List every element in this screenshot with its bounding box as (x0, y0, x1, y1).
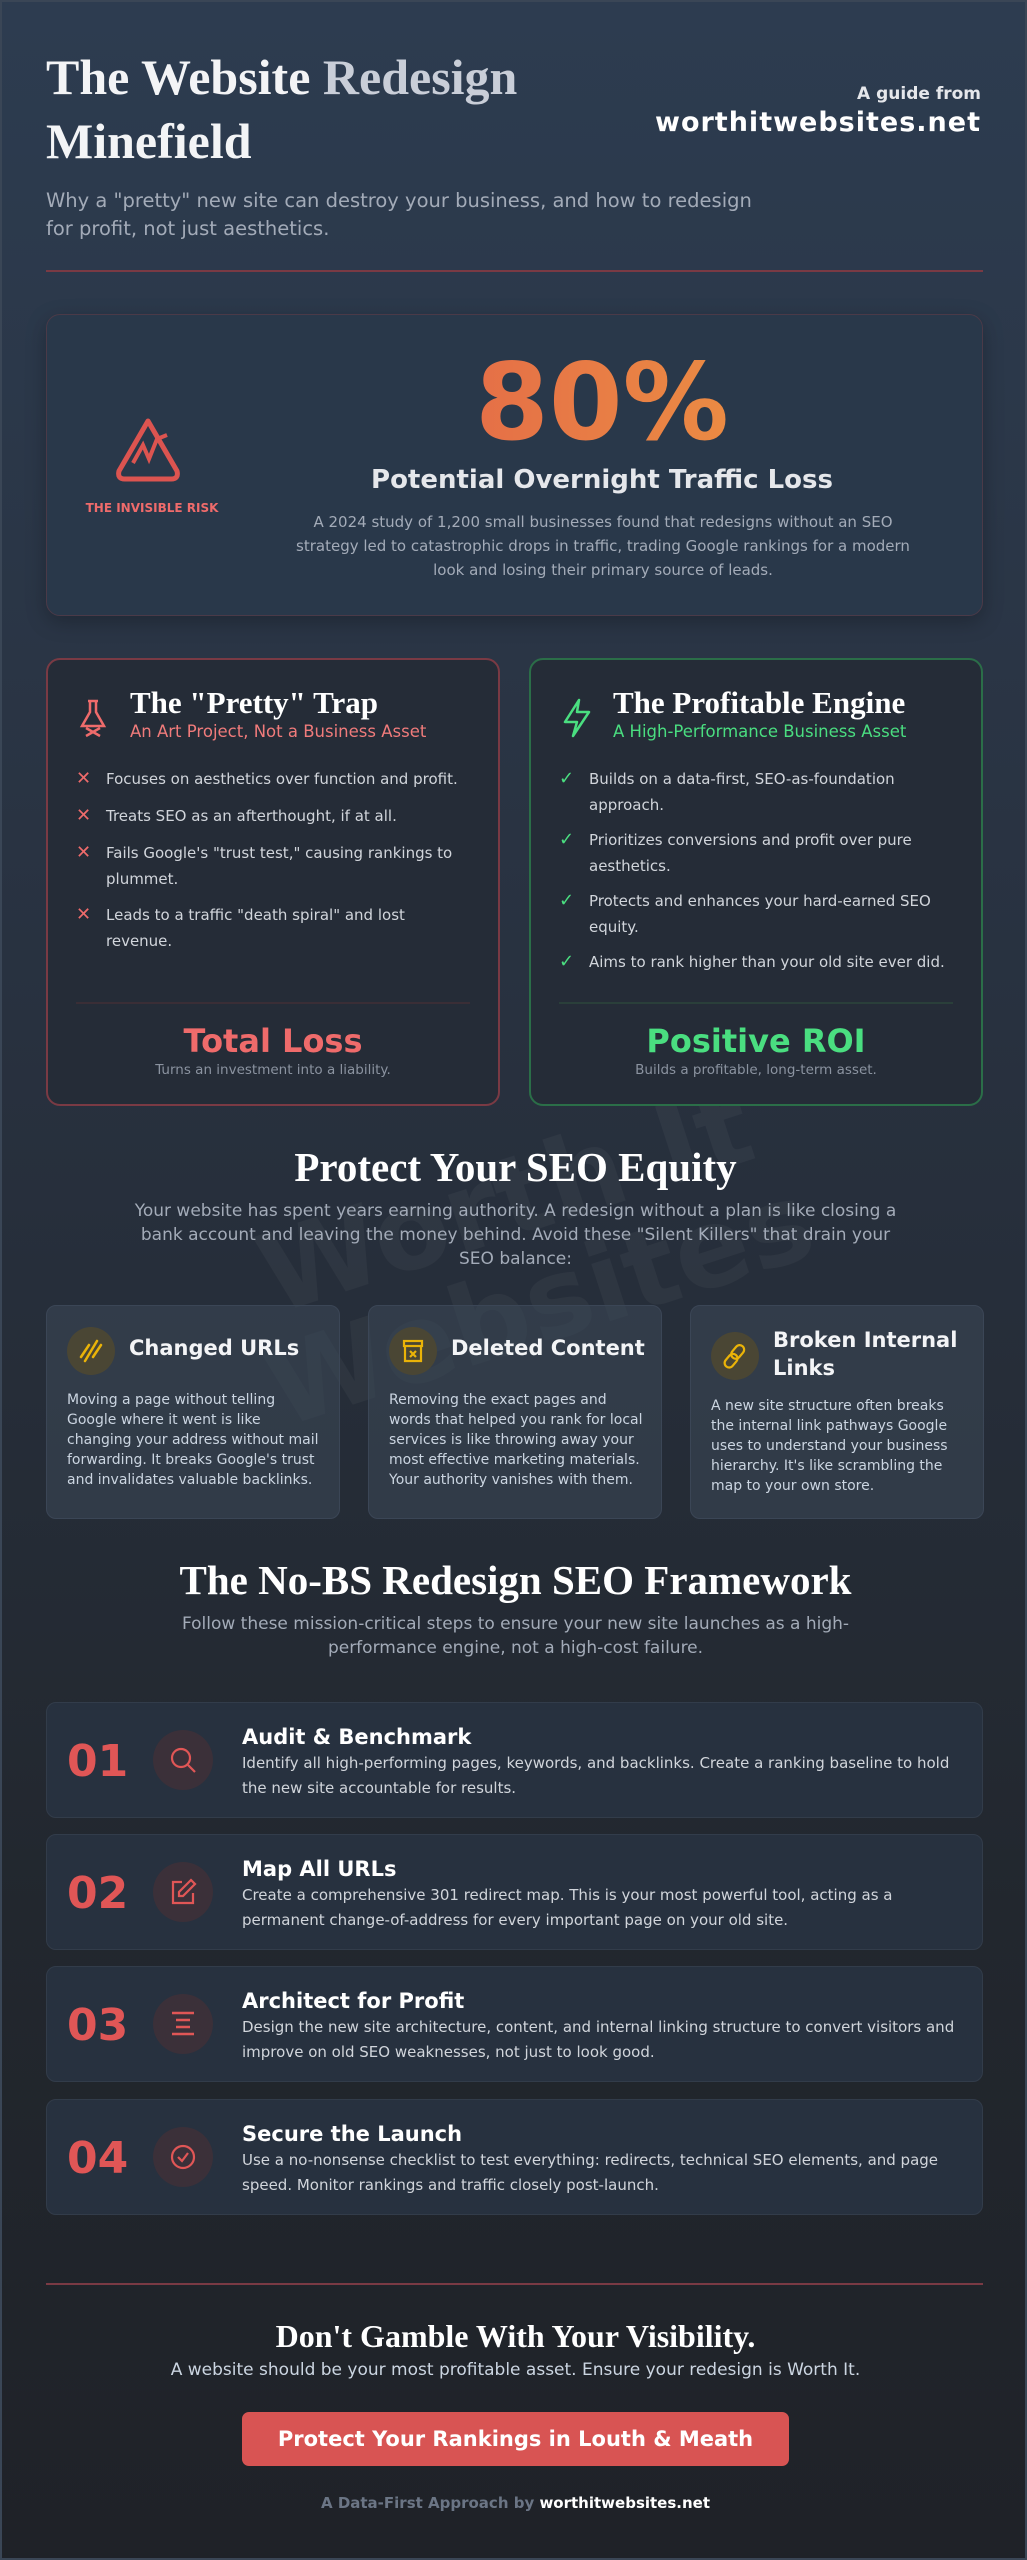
step 02: Map All URLs (242, 1857, 396, 1881)
panel: profitable engine: ✓ (559, 890, 574, 911)
heading: SEO equity: Protect Your SEO Equity (294, 1144, 737, 1190)
step 03 (46, 1966, 983, 2082)
list: Builds on a data-first, SEO-as-foundation approach. (589, 770, 895, 814)
step 04 (46, 2099, 983, 2215)
panel: profitable engine: Builds a profitable, long-term asset. (635, 1062, 877, 1078)
card: broken links: A new site structure often breaks the internal link pathways Google uses to understand your business hierarchy. It's like scrambling the map to your own store. (711, 1398, 948, 1494)
footer: A Data-First Approach by worthitwebsites.net (321, 2494, 710, 2512)
panel: profitable engine (529, 658, 983, 1106)
brand (655, 84, 981, 138)
heading: cta: Don't Gamble With Your Visibility. (276, 2318, 755, 2354)
panel: profitable engine: Prioritizes conversions and profit over pure aesthetics. (589, 831, 912, 875)
list: ✓ (559, 768, 574, 789)
card: deleted content: Removing the exact pages and words that helped you rank for local services is like throwing away your most effective marketing materials. Your authority vanishes with them. (389, 1392, 643, 1488)
step 01: Identify all high-performing pages, keywords, and backlinks. Create a ranking baseline to hold the new site accountable for results. (242, 1754, 949, 1797)
text: equity intro (134, 1201, 896, 1269)
stat label: Potential Overnight Traffic Loss (371, 465, 833, 495)
text: equity intro: SEO balance: (459, 1249, 572, 1269)
heading: The Profitable Engine (613, 685, 905, 720)
panel: pretty trap: Leads to a traffic "death spiral" and lost (106, 906, 405, 924)
icon: risk (116, 418, 180, 482)
icon: lines (153, 1994, 213, 2054)
step 01 (46, 1702, 983, 1818)
card: changed urls: Changed URLs (129, 1336, 299, 1360)
panel: stat (46, 314, 983, 616)
icon: edit (153, 1862, 213, 1922)
watermark: Websites (250, 1156, 828, 1453)
card: changed urls (46, 1305, 340, 1519)
button: Protect Your Rankings in Louth & Meath (278, 2427, 753, 2451)
panel: pretty trap: Treats SEO as an afterthought, if at all. (106, 807, 397, 825)
panel: pretty trap: Turns an investment into a liability. (155, 1062, 391, 1078)
big number (277, 347, 927, 459)
card: deleted content (368, 1305, 662, 1519)
card: deleted content: Deleted Content (451, 1336, 645, 1360)
text: cta: A website should be your most profitable asset. Ensure your redesign is Worth It. (171, 2360, 860, 2380)
list: ✕ (76, 768, 91, 789)
step 04: Use a no-nonsense checklist to test everything: redirects, technical SEO elements, and page speed. Monitor rankings and traffic closely post-launch. (242, 2151, 938, 2194)
panel: profitable engine: A High-Performance Business Asset (613, 722, 906, 741)
icon: link (711, 1332, 759, 1380)
card: broken links: Broken Internal (773, 1328, 957, 1352)
result: Positive ROI (646, 1022, 866, 1060)
icon: broken link (67, 1327, 115, 1375)
panel: profitable engine: ✓ (559, 829, 574, 850)
heading: framework: The No-BS Redesign SEO Framework (180, 1557, 851, 1603)
subtitle: Why a "pretty" new site can destroy your business, and how to redesign (46, 189, 752, 212)
icon: bin (389, 1327, 437, 1375)
panel: pretty trap: ✕ (76, 805, 91, 826)
panel: pretty trap: ✕ (76, 904, 91, 925)
heading: The "Pretty" Trap (130, 685, 378, 720)
icon: bolt (564, 698, 590, 738)
big number: 80% (475, 341, 729, 464)
subtitle: for profit, not just aesthetics. (46, 217, 329, 240)
panel: profitable engine: Protects and enhances your hard-earned SEO equity. (589, 892, 931, 936)
watermark (155, 1039, 889, 1465)
text: equity intro: bank account and leaving the money behind. Avoid these "Silent Killers" that drain your (141, 1225, 890, 1245)
panel: pretty trap: An Art Project, Not a Business Asset (130, 722, 426, 741)
title (46, 49, 517, 169)
step 04: 04 (67, 2133, 128, 2184)
step 02 (46, 1834, 983, 1950)
title: Minefield (46, 113, 252, 169)
description: A 2024 study of 1,200 small businesses found that redesigns without an SEO strategy led to catastrophic drops in traffic, trading Google rankings for a modern look and losing their primary source of leads. (296, 513, 910, 579)
brand: A guide from (857, 84, 981, 104)
label: THE INVISIBLE RISK (86, 501, 218, 515)
text: framework intro: Follow these mission-critical steps to ensure your new site launches as a high-performance engine, not a high-cost failure. (182, 1614, 849, 1658)
subtitle (46, 189, 752, 240)
panel: profitable engine: Aims to rank higher than your old site ever did. (589, 953, 945, 971)
brand: worthitwebsites.net (655, 107, 981, 138)
step 04: Secure the Launch (242, 2122, 462, 2146)
step 02: Create a comprehensive 301 redirect map. This is your most powerful tool, acting as a permanent change-of-address for every important page on your old site. (242, 1886, 892, 1929)
card: changed urls: Moving a page without telling Google where it went is like changing your address without mail forwarding. It breaks Google's trust and invalidates valuable backlinks. (67, 1392, 318, 1488)
step 01: Audit & Benchmark (242, 1725, 471, 1749)
icon: check circle (153, 2127, 213, 2187)
card: broken links: Links (773, 1356, 835, 1380)
panel: pretty trap (46, 658, 500, 1106)
step 03: Architect for Profit (242, 1989, 464, 2013)
step 03: 03 (67, 2000, 128, 2051)
panel: pretty trap: ✕ (76, 842, 91, 863)
button (242, 2412, 789, 2466)
step 02: 02 (67, 1868, 128, 1919)
text: equity intro: Your website has spent years earning authority. A redesign without a plan is like closing a (135, 1201, 896, 1221)
icon: flask (80, 700, 106, 738)
card: broken links (690, 1305, 984, 1519)
panel: pretty trap: revenue. (106, 932, 172, 950)
step 03: Design the new site architecture, content, and internal linking structure to convert visitors and improve on old SEO weaknesses, not just to look good. (242, 2018, 954, 2061)
panel: profitable engine: ✓ (559, 951, 574, 972)
icon: search (153, 1730, 213, 1790)
list: Focuses on aesthetics over function and profit. (106, 770, 458, 788)
result: Total Loss (183, 1022, 363, 1060)
panel: pretty trap: Fails Google's "trust test," causing rankings to plummet. (106, 844, 452, 888)
watermark: Worth It (243, 1060, 767, 1339)
step 01: 01 (67, 1736, 128, 1787)
title: The Website Redesign (46, 49, 517, 105)
